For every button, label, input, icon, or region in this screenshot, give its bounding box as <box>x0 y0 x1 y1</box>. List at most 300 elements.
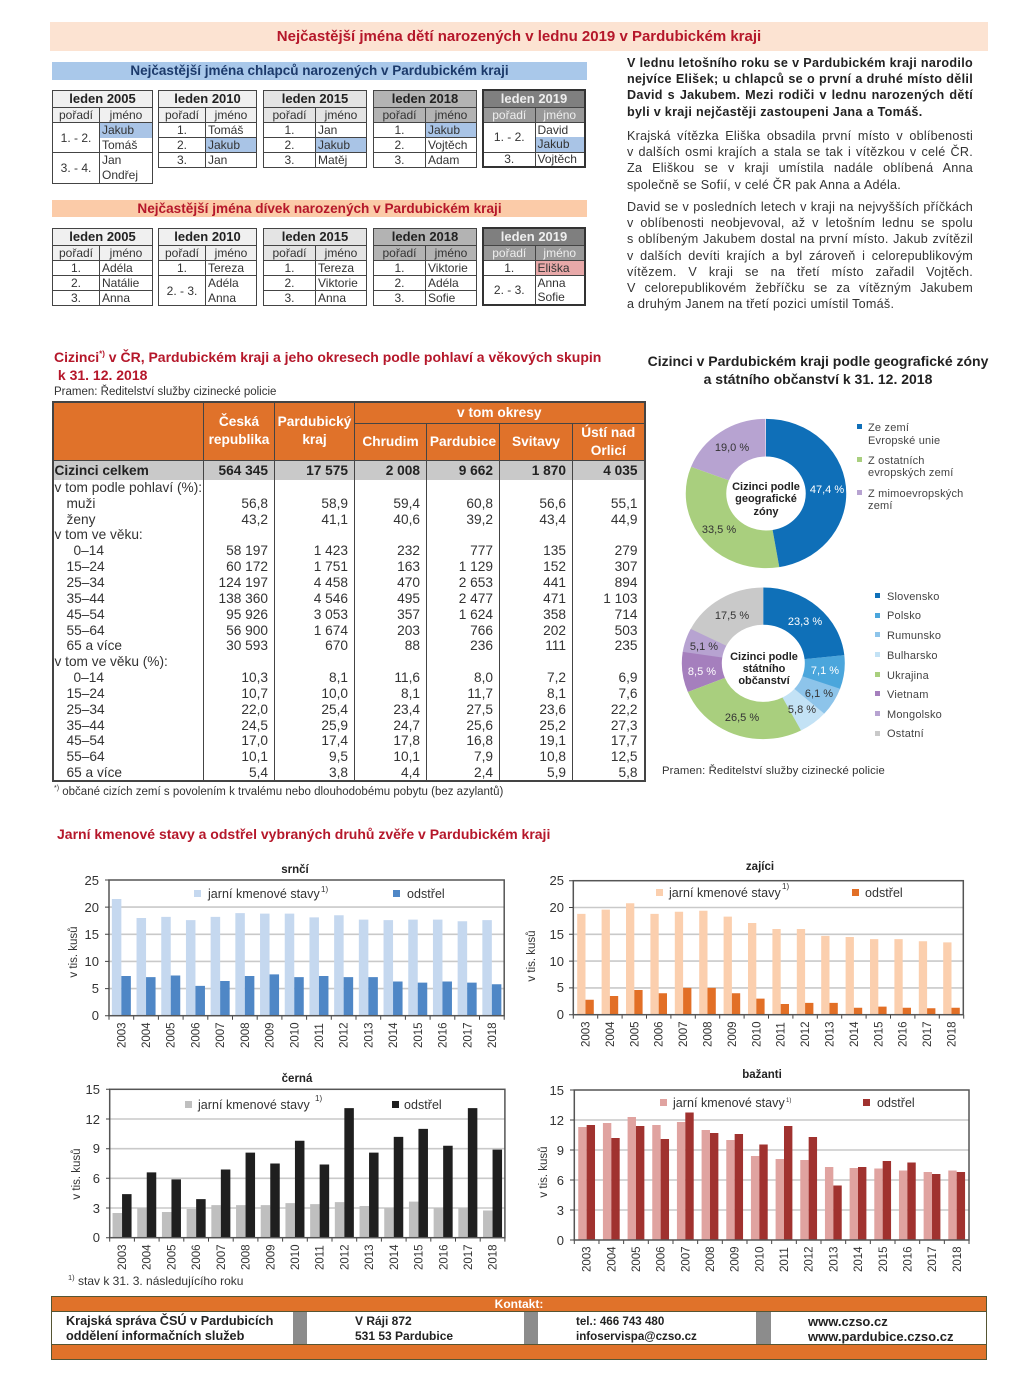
table: foreigners by sex and age: 8,0 <box>474 670 493 685</box>
table: foreigners by sex and age: 10,7 <box>241 686 268 701</box>
table: girls 2018: 1. <box>394 261 404 275</box>
heading: girls names: Nejčastější jména dívek narozených v Pardubickém kraji <box>137 201 502 216</box>
chart: bažanti: bažanti <box>742 1069 782 1081</box>
text block: third paragraph: s oblíbeným Jakubem dostal na první místo. Jakub zvítězil <box>627 232 973 246</box>
table: boys 2015: leden 2015 <box>282 91 348 106</box>
table: foreigners by sex and age: 4 546 <box>314 591 348 606</box>
table: foreigners by sex and age: 5,8 <box>618 765 638 780</box>
table: girls 2018: Viktorie <box>428 261 468 275</box>
table: girls 2015: 2. <box>284 276 294 290</box>
year labels: bažanti: 2009 <box>730 1246 742 1272</box>
table: girls 2015: Anna <box>318 291 346 305</box>
donut values: citizenship: 6,1 % <box>805 688 833 700</box>
legend: citizenship: Vietnam <box>887 689 929 701</box>
year labels: černá: 2007 <box>216 1244 228 1270</box>
heading: donut charts: Cizinci v Pardubickém kraji podle geografické zóny <box>648 353 988 369</box>
legend: citizenship: Slovensko <box>887 591 940 603</box>
table: girls 2018: Adéla <box>428 276 459 290</box>
table: foreigners by sex and age: 495 <box>397 591 420 606</box>
year labels: bažanti: 2014 <box>853 1246 865 1272</box>
year labels: černá: 2011 <box>315 1245 327 1270</box>
year labels: zajíci: 2005 <box>629 1021 641 1047</box>
year labels: černá: 2010 <box>290 1244 302 1270</box>
year labels: srnčí: 2006 <box>190 1022 202 1048</box>
table: boys 2018: Vojtěch <box>428 138 467 152</box>
year labels: bažanti: 2004 <box>606 1246 618 1272</box>
table: foreigners by sex and age: 27,5 <box>466 702 493 717</box>
year labels: zajíci: 2009 <box>727 1021 739 1047</box>
table: foreigners by sex and age: 564 345 <box>219 462 268 478</box>
table: girls 2005: 2. <box>71 276 81 290</box>
table: foreigners by sex and age: republika <box>209 432 269 447</box>
chart: černá: černá <box>282 1073 313 1085</box>
donut values: citizenship: 5,8 % <box>788 704 816 716</box>
y axis: srnčí <box>68 873 99 1023</box>
table: foreigners by sex and age: 4,4 <box>401 765 420 780</box>
legend: citizenship: Bulharsko <box>887 650 938 662</box>
table: foreigners by sex and age: 2 008 <box>386 462 420 478</box>
text block: third paragraph <box>627 200 973 311</box>
y axis: bažanti: 12 <box>550 1113 564 1128</box>
table: foreigners by sex and age: 56,6 <box>539 496 566 511</box>
contact: web: www.pardubice.czso.cz <box>808 1329 953 1344</box>
year labels: srnčí: 2013 <box>363 1022 375 1048</box>
table: foreigners by sex and age: 7,6 <box>618 686 638 701</box>
y axis: bažanti: 9 <box>557 1143 564 1158</box>
year labels: zajíci: 2006 <box>654 1021 666 1047</box>
year labels: černá <box>117 1244 500 1270</box>
table: foreigners by sex and age: 60 172 <box>226 559 268 574</box>
table: foreigners by sex and age: 111 <box>545 638 566 653</box>
contact: header strip <box>52 1297 986 1312</box>
year labels: srnčí: 2015 <box>413 1022 425 1048</box>
table: foreigners by sex and age: 3 053 <box>314 607 348 622</box>
legend: srnčí <box>194 885 445 901</box>
table: foreigners by sex and age: 232 <box>397 543 420 558</box>
y axis: srnčí: 20 <box>85 900 99 915</box>
table: boys 2018: 1. <box>394 123 404 137</box>
table: foreigners by sex and age: Ústí nad <box>581 424 635 440</box>
y axis: zajíci: 15 <box>550 927 564 942</box>
table: foreigners by sex and age: 163 <box>397 559 420 574</box>
table: foreigners by sex and age: 45–54 <box>66 733 105 748</box>
year labels: zajíci: 2004 <box>605 1021 617 1047</box>
heading: girls names <box>52 200 587 217</box>
table: foreigners by sex and age: 24,7 <box>393 718 420 733</box>
heading: boys names <box>52 62 587 80</box>
table: foreigners by sex and age: muži <box>66 496 95 511</box>
table: foreigners by sex and age: 88 <box>405 638 420 653</box>
year labels: bažanti: 2017 <box>927 1246 939 1272</box>
table: boys 2005: Jakub <box>102 123 134 137</box>
year labels: bažanti: 2013 <box>828 1246 840 1272</box>
donut centre label: citizenship <box>730 651 798 687</box>
table: foreigners by sex and age: 56 900 <box>226 623 268 638</box>
text block: second paragraph: Krajská vítězka Eliška obsadila první místo v oblíbenosti <box>627 129 973 143</box>
table: boys 2010 <box>158 90 257 168</box>
contact: footer strip <box>52 1344 986 1359</box>
table: boys 2018: jméno <box>435 108 467 122</box>
table: foreigners by sex and age: 45–54 <box>66 607 105 622</box>
table: foreigners by sex and age: 307 <box>615 559 638 574</box>
table: foreigners by sex and age: 5,4 <box>249 765 268 780</box>
text block: second paragraph: společně se Sofií, v celé ČR pak Anna a Adéla. <box>627 178 901 192</box>
donut centre label: citizenship: občanství <box>738 675 791 687</box>
year labels: zajíci: 2013 <box>824 1021 836 1047</box>
table: foreigners by sex and age: 7,2 <box>547 670 566 685</box>
bars: srnčí <box>109 899 504 1020</box>
table: foreigners by sex and age: 44,9 <box>611 512 638 527</box>
year labels: zajíci: 2014 <box>849 1021 861 1047</box>
table: boys 2018: 3. <box>394 153 404 167</box>
table: girls 2010: 1. <box>177 261 187 275</box>
legend: citizenship: Polsko <box>887 610 921 622</box>
legend: srnčí: jarní kmenové stavy <box>207 887 320 901</box>
donut centre label: zones: Cizinci podle <box>732 481 800 493</box>
table: foreigners by sex and age: 670 <box>325 638 348 653</box>
table: foreigners by sex and age: 503 <box>615 623 638 638</box>
year labels: bažanti: 2006 <box>656 1246 668 1272</box>
legend: citizenship: Ostatní <box>887 728 924 740</box>
donut centre label: zones: geografické <box>735 493 797 505</box>
table: boys 2005: jméno <box>110 108 142 122</box>
chart: černá <box>70 1072 506 1270</box>
table: foreigners by sex and age: 59,4 <box>393 496 420 511</box>
chart: srnčí: srnčí <box>281 864 310 876</box>
text block: lead paragraph: nejvíce Elišek; u chlapců se o první a druhé místo dělil <box>627 72 973 86</box>
table: girls 2010: leden 2010 <box>174 229 241 244</box>
year labels: černá: 2013 <box>364 1244 376 1270</box>
table: foreigners by sex and age: 10,1 <box>241 749 268 764</box>
y axis: bažanti: 15 <box>550 1083 564 1098</box>
heading: donut charts <box>648 353 988 387</box>
table: girls 2019: pořadí <box>492 246 526 260</box>
table: boys 2018: pořadí <box>382 108 417 122</box>
table: foreigners by sex and age: Svitavy <box>512 434 560 448</box>
table: girls 2010 <box>158 228 257 306</box>
table: foreigners by sex and age: 7,9 <box>474 749 493 764</box>
contact: address <box>355 1314 453 1343</box>
y axis: zajíci: 20 <box>550 900 564 915</box>
table: foreigners by sex and age: 25,2 <box>539 718 566 733</box>
table: girls 2019: jméno <box>543 246 576 260</box>
table: foreigners by sex and age: 1 423 <box>314 543 348 558</box>
table: girls 2010: pořadí <box>165 246 199 260</box>
table: girls 2015: leden 2015 <box>282 229 348 244</box>
year labels: zajíci: 2003 <box>580 1021 592 1047</box>
table: boys 2015: Matěj <box>318 153 347 167</box>
table: foreigners by sex and age: 2,4 <box>474 765 493 780</box>
donut centre label: citizenship: Cizinci podle <box>730 651 798 663</box>
footnote: charts: 1) stav k 31. 3. následujícího roku <box>68 1273 243 1288</box>
year labels: zajíci: 2010 <box>751 1021 763 1047</box>
year labels: černá: 2003 <box>117 1244 129 1270</box>
legend: srnčí: 1) <box>321 885 328 894</box>
table: foreigners by sex and age: 11,7 <box>467 686 493 701</box>
table: foreigners by sex and age: 25,9 <box>321 718 348 733</box>
y axis: srnčí: 15 <box>85 927 99 942</box>
y axis: zajíci: v tis. kusů <box>526 930 538 982</box>
table: foreigners by sex and age: 202 <box>543 623 566 638</box>
year labels: srnčí: 2009 <box>265 1022 277 1048</box>
year labels: černá: 2012 <box>339 1244 351 1270</box>
donut values: citizenship: 8,5 % <box>688 666 716 678</box>
table: foreigners by sex and age: 1 674 <box>314 623 348 638</box>
title <box>50 22 988 51</box>
year labels: zajíci: 2007 <box>678 1021 690 1047</box>
legend: bažanti <box>660 1096 915 1110</box>
table: foreigners by sex and age: 9,5 <box>329 749 348 764</box>
year labels: srnčí: 2018 <box>487 1022 499 1048</box>
table: boys 2005: pořadí <box>59 108 93 122</box>
legend: zajíci: odstřel <box>865 886 903 900</box>
table: girls 2018: 3. <box>394 291 404 305</box>
table: foreigners by sex and age: 11,6 <box>394 670 420 685</box>
table: foreigners by sex and age: Česká <box>219 414 259 429</box>
table: foreigners by sex and age: 279 <box>615 543 638 558</box>
year labels: bažanti: 2003 <box>582 1246 594 1272</box>
legend: zajíci: jarní kmenové stavy <box>668 886 781 900</box>
y axis: černá: 15 <box>86 1082 100 1097</box>
table: foreigners by sex and age: 894 <box>615 575 638 590</box>
table: boys 2019: David <box>538 123 568 137</box>
table: foreigners by sex and age: 17,8 <box>393 733 420 748</box>
table: boys 2018: 2. <box>394 138 404 152</box>
table: foreigners by sex and age: 56,8 <box>241 496 268 511</box>
text block: third paragraph: a druhým Janem na třetí pozici umístil Tomáš. <box>627 297 894 311</box>
table: foreigners by sex and age: 4 458 <box>314 575 348 590</box>
donut centre label: citizenship: státního <box>743 663 786 675</box>
table: boys 2015: Jakub <box>318 138 350 152</box>
table: foreigners by sex and age: 25–34 <box>66 575 105 590</box>
table: foreigners by sex and age: 2 653 <box>459 575 493 590</box>
y axis: černá: 6 <box>93 1171 100 1186</box>
text block: second paragraph <box>627 129 973 192</box>
heading: donut charts: a státního občanství k 31. 12. 2018 <box>704 371 932 387</box>
year labels: zajíci: 2011 <box>776 1022 788 1047</box>
table: boys 2005: Tomáš <box>102 138 137 152</box>
footnote: table: *) občané cizích zemí s povolením k trvalému nebo dlouhodobému pobytu (bez azylantů) <box>54 785 503 798</box>
table: foreigners by sex and age: 39,2 <box>466 512 493 527</box>
year labels: černá: 2006 <box>191 1244 203 1270</box>
table: girls 2019: Sofie <box>538 290 565 304</box>
text block: lead paragraph <box>627 56 974 119</box>
contact panel <box>51 1296 987 1360</box>
table: girls 2005: 3. <box>71 291 81 305</box>
table: girls 2010: jméno <box>215 246 247 260</box>
contact: office <box>66 1313 273 1343</box>
table: boys 2019: 3. <box>504 152 514 166</box>
table: foreigners by sex and age: 15–24 <box>66 559 105 574</box>
table: girls 2018: pořadí <box>382 246 417 260</box>
table: foreigners by sex and age: 19,1 <box>539 733 566 748</box>
table: foreigners by sex and age: 22,0 <box>241 702 268 717</box>
table: boys 2005: Ondřej <box>102 168 138 182</box>
table: foreigners by sex and age: 10,0 <box>321 686 348 701</box>
donut values: zones: 47,4 % <box>810 484 844 496</box>
table: girls 2018: 2. <box>394 276 404 290</box>
year labels: černá: 2008 <box>241 1244 253 1270</box>
y axis: černá: 3 <box>93 1201 100 1216</box>
table: foreigners by sex and age: 0–14 <box>74 543 104 558</box>
table: girls 2010: Adéla <box>208 276 239 290</box>
chart: bažanti <box>538 1069 970 1272</box>
table: foreigners by sex and age: 10,1 <box>393 749 420 764</box>
table: foreigners by sex and age: 1 624 <box>459 607 493 622</box>
table: boys 2019: leden 2019 <box>501 91 567 106</box>
table: foreigners by sex and age: 65 a více <box>66 638 122 653</box>
legend: černá: jarní kmenové stavy <box>197 1098 310 1112</box>
table: boys 2015: Jan <box>318 123 337 137</box>
bars: černá <box>110 1108 505 1242</box>
y axis: černá: 12 <box>86 1112 100 1127</box>
contact: office: Krajská správa ČSÚ v Pardubicích <box>66 1314 273 1328</box>
chart: zajíci <box>526 861 964 1047</box>
donut values: zones: 33,5 % <box>702 524 736 536</box>
year labels: bažanti: 2010 <box>754 1246 766 1272</box>
table: foreigners by sex and age: 22,2 <box>611 702 638 717</box>
table: foreigners by sex and age: 27,3 <box>611 718 638 733</box>
heading: foreigners table: Cizinci*) v ČR, Pardubickém kraji a jeho okresech podle pohlaví a věkových skupin <box>54 349 601 365</box>
table: girls 2010: Tereza <box>208 261 244 275</box>
year labels: černá: 2014 <box>389 1244 401 1270</box>
contact: address: 531 53 Pardubice <box>355 1329 453 1343</box>
chart: zajíci: zajíci <box>746 861 774 873</box>
y axis: bažanti <box>538 1083 564 1248</box>
table: foreigners by sex and age: 55–64 <box>66 749 105 764</box>
table: foreigners by sex and age: 471 <box>543 591 566 606</box>
table: foreigners by sex and age: 135 <box>543 543 566 558</box>
year labels: srnčí: 2003 <box>116 1022 128 1048</box>
source note: table: Pramen: Ředitelství služby cizinecké policie <box>54 386 276 398</box>
legend: černá <box>185 1094 442 1112</box>
year labels: bažanti: 2011 <box>779 1247 791 1272</box>
table: girls 2005: Anna <box>102 291 130 305</box>
table: foreigners by sex and age: Pardubice <box>430 434 496 448</box>
year labels: černá: 2016 <box>438 1244 450 1270</box>
table: foreigners by sex and age: 124 197 <box>219 575 268 590</box>
contact: phone and email <box>576 1315 697 1343</box>
table: foreigners by sex and age: 1 103 <box>603 591 638 606</box>
table: boys 2019: jméno <box>543 108 576 122</box>
heading: boys names: Nejčastější jména chlapců narozených v Pardubickém kraji <box>130 63 509 78</box>
table: boys 2015: 3. <box>284 153 294 167</box>
year labels: zajíci: 2018 <box>946 1021 958 1047</box>
table: foreigners by sex and age <box>52 401 646 782</box>
table: foreigners by sex and age: 203 <box>397 623 420 638</box>
heading: game charts: Jarní kmenové stavy a odstřel vybraných druhů zvěře v Pardubickém kraji <box>57 826 550 842</box>
y axis: zajíci: 10 <box>550 954 564 969</box>
table: girls 2015: jméno <box>325 246 357 260</box>
donut centre label: zones <box>732 481 800 518</box>
legend: citizenship: Rumunsko <box>887 630 941 642</box>
year labels: bažanti: 2012 <box>804 1246 816 1272</box>
table: girls 2005: pořadí <box>59 246 93 260</box>
table: foreigners by sex and age: v tom ve věku: <box>54 527 143 542</box>
table: foreigners by sex and age: 714 <box>615 607 638 622</box>
legend: citizenship: Ukrajina <box>887 670 930 682</box>
y axis: bažanti: 3 <box>557 1203 564 1218</box>
table: foreigners by sex and age: 35–44 <box>66 591 105 606</box>
table: boys 2015: 2. <box>284 138 294 152</box>
donut values: citizenship: 23,3 % <box>788 616 822 628</box>
text block: lead paragraph: byli v kraji nejčastěji zastoupeni Jana a Tomáš. <box>627 105 923 119</box>
donut values: citizenship: 17,5 % <box>715 610 749 622</box>
table: girls 2019 <box>482 227 586 306</box>
table: foreigners by sex and age: 23,4 <box>393 702 420 717</box>
table: boys 2010: 2. <box>177 138 187 152</box>
table: foreigners by sex and age: 43,4 <box>539 512 566 527</box>
table: boys 2015: jméno <box>325 108 357 122</box>
y axis: zajíci: 0 <box>557 1007 564 1022</box>
table: boys 2015: 1. <box>284 123 294 137</box>
table: girls 2019: leden 2019 <box>501 229 567 244</box>
heading: foreigners table: k 31. 12. 2018 <box>58 367 147 383</box>
y axis: srnčí: 0 <box>92 1008 99 1023</box>
donut centre label: zones: zóny <box>753 506 779 518</box>
year labels: zajíci: 2016 <box>898 1021 910 1047</box>
table: girls 2015: Tereza <box>318 261 354 275</box>
donut rings: citizenship <box>702 606 825 720</box>
text block: third paragraph: V celorepublikovém žebříčku se za vítězným Jakubem <box>627 281 973 295</box>
legend: zones: Evropské unie <box>868 435 940 447</box>
table: foreigners by sex and age: 10,8 <box>539 749 566 764</box>
table: boys 2010: jméno <box>215 108 247 122</box>
table: foreigners by sex and age: 10,3 <box>241 670 268 685</box>
legend: zones: zemí <box>868 500 893 512</box>
year labels: srnčí: 2010 <box>289 1022 301 1048</box>
table: girls 2019: Anna <box>538 276 566 290</box>
table: girls 2010: Anna <box>208 291 236 305</box>
table: boys 2019: Vojtěch <box>538 152 577 166</box>
legend: srnčí: odstřel <box>407 887 445 901</box>
year labels: srnčí: 2014 <box>388 1022 400 1048</box>
contact: office: oddělení informačních služeb <box>66 1329 244 1343</box>
table: foreigners by sex and age: 16,8 <box>466 733 493 748</box>
table: boys 2019: pořadí <box>492 108 526 122</box>
table: foreigners by sex and age: 777 <box>470 543 493 558</box>
table: boys 2018 <box>373 90 477 168</box>
table: girls 2018: Sofie <box>428 291 455 305</box>
year labels: srnčí: 2017 <box>462 1022 474 1048</box>
legend: citizenship: Mongolsko <box>887 709 942 721</box>
table: foreigners by sex and age: 3,8 <box>329 765 348 780</box>
table: foreigners by sex and age: 8,1 <box>547 686 566 701</box>
table: foreigners by sex and age: 24,5 <box>241 718 268 733</box>
table: girls 2015: pořadí <box>272 246 307 260</box>
y axis: srnčí: 10 <box>85 954 99 969</box>
year labels: černá: 2005 <box>166 1244 178 1270</box>
table: foreigners by sex and age: 0–14 <box>74 670 104 685</box>
table: boys 2005: Jan <box>102 153 121 167</box>
table: foreigners by sex and age: 9 662 <box>459 462 493 478</box>
donut rings: zones <box>706 438 826 549</box>
table: foreigners by sex and age: 152 <box>543 559 566 574</box>
table: foreigners by sex and age: 58,9 <box>321 496 348 511</box>
table: boys 2010: Tomáš <box>208 123 243 137</box>
year labels: zajíci <box>580 1021 958 1047</box>
table: foreigners by sex and age: 441 <box>543 575 566 590</box>
table: foreigners by sex and age: 17 575 <box>306 462 348 478</box>
year labels: bažanti: 2008 <box>705 1246 717 1272</box>
y axis: srnčí: 5 <box>92 981 99 996</box>
bars: zajíci <box>573 903 964 1019</box>
donut values: zones <box>702 442 844 536</box>
text block: third paragraph: v dalších devíti krajích a byl zároveň i celorepublikovým <box>627 249 973 263</box>
year labels: srnčí: 2007 <box>215 1022 227 1048</box>
year labels: srnčí: 2005 <box>166 1022 178 1048</box>
legend: zajíci: 1) <box>782 882 789 891</box>
